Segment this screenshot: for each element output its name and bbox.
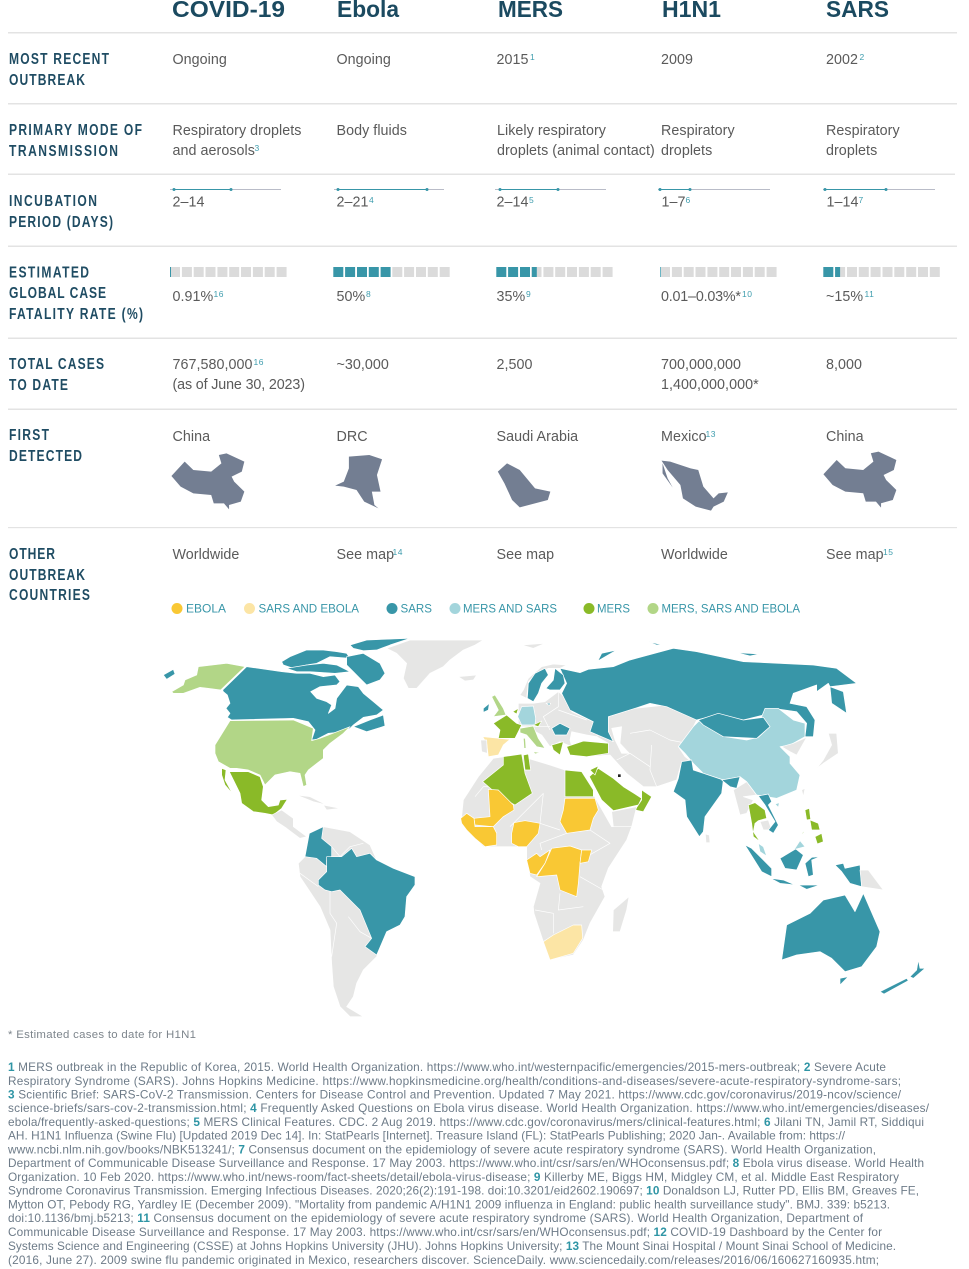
Madagascar <box>613 897 629 932</box>
row: first detected: DRC <box>336 429 368 445</box>
row: incubation period <box>9 188 935 230</box>
row: first detected: Mexico <box>661 429 707 445</box>
row: primary mode of transmission: Respiratory droplets <box>172 123 301 139</box>
Alaska <box>172 663 245 693</box>
references: Syndrome Coronavirus Transmission. Emerging Infectious Diseases. 2020;26(2):191-198. doi:10.3201/eid2602.190697; 10 Donaldson LJ, Rutter PD, Ellis BM, Greaves FE, <box>8 1184 919 1198</box>
column headings <box>172 0 889 22</box>
Southeast Asia grey <box>705 782 772 843</box>
row: primary mode of transmission: 3 <box>254 143 260 153</box>
row: incubation period: 5 <box>529 195 534 205</box>
references: doi:10.1136/bmj.b5213; 11 Consensus document on the epidemiology of severe acute respiratory syndrome (SARS). World Health Organization, Department of <box>8 1211 864 1225</box>
row: fatality rate: GLOBAL CASE <box>9 284 106 301</box>
row: most recent outbreak: 2 <box>860 52 865 62</box>
row: fatality rate: 0.91% <box>172 289 214 305</box>
row: primary mode of transmission: droplets (animal contact) <box>497 143 655 159</box>
row: primary mode of transmission: Respiratory <box>826 123 900 139</box>
Yemen <box>612 807 637 827</box>
row: total cases: TOTAL CASES <box>9 355 104 372</box>
row: incubation period: 7 <box>858 195 864 205</box>
row: other outbreak countries: OTHER <box>9 545 55 562</box>
row: most recent outbreak: Ongoing <box>336 52 391 68</box>
Egypt <box>565 770 593 797</box>
Ebola central Africa <box>527 798 598 897</box>
row: primary mode of transmission: and aerosols <box>172 143 255 159</box>
row: fatality rate: ~15% <box>826 289 863 305</box>
references: science-briefs/sars-cov-2-transmission.html; 4 Frequently Asked Questions on Ebola virus disease. World Health Organization. https://www.who.int/emergencies/diseases/ <box>8 1101 930 1115</box>
Nordic countries <box>527 668 565 705</box>
Papua New Guinea <box>860 870 883 890</box>
references: Respiratory Syndrome (SARS). Johns Hopkins Medicine. https://www.hopkinsmedicine.org/health/conditions-and-diseases/severe-acute-respiratory-syndrome-sars; <box>8 1074 901 1088</box>
row: most recent outbreak: 2009 <box>661 52 693 68</box>
row: incubation period: 1–7 <box>662 194 686 210</box>
Kuwait <box>618 774 621 777</box>
Malaysia <box>758 841 805 857</box>
Russia <box>560 642 857 742</box>
references: Communicable Disease Surveillance and Response. 17 May 2003. https://www.who.int/csr/sars/en/WHOconsensus.pdf; 12 COVID-19 Dashboard by the Center for <box>8 1225 882 1239</box>
references: Organization. 10 Feb 2020. https://www.who.int/news-room/fact-sheets/detail/ebola-virus-disease; 9 Killerby ME, Biggs HM, Midgley CM, et al. Middle East Respiratory <box>8 1170 899 1184</box>
South Africa <box>543 925 583 960</box>
row: fatality rate <box>9 263 940 322</box>
Vietnam <box>758 794 778 833</box>
row: first detected <box>9 426 896 511</box>
row: other outbreak countries: See map <box>826 547 884 563</box>
row: fatality rate: 8 <box>366 289 371 299</box>
map legend: MERS, SARS AND EBOLA <box>662 602 800 616</box>
row: most recent outbreak <box>9 50 865 88</box>
map legend: MERS AND SARS <box>463 602 557 616</box>
row: other outbreak countries: 14 <box>392 547 403 557</box>
Central America and Caribbean <box>272 795 340 838</box>
row: most recent outbreak: 2015 <box>496 52 529 68</box>
row: fatality rate: ESTIMATED <box>9 263 89 281</box>
row: incubation period: PERIOD (DAYS) <box>9 213 113 230</box>
row: incubation period: 2–21 <box>336 194 369 210</box>
icon: China silhouette <box>171 453 244 509</box>
Europe and central Asia grey <box>518 692 697 787</box>
Americas and western Europe <box>163 638 545 1017</box>
row: primary mode of transmission: droplets <box>661 143 712 159</box>
map legend: SARS <box>400 602 432 616</box>
references: 3 Scientific Brief: SARS-CoV-2 Transmission. Centers for Disease Control and Prevention. Updated 7 May 2021. https://www.cdc.gov/coronavirus/2019-ncov/science/ <box>8 1088 902 1102</box>
map legend: SARS AND EBOLA <box>258 602 359 616</box>
New Zealand <box>880 960 925 994</box>
references: AH. H1N1 Influenza (Swine Flu) [Updated 2019 Dec 14]. In: StatPearls [Internet]. Treasure Island (FL): StatPearls Publishing; 2020 Jan-. Available from: https:// <box>8 1128 846 1142</box>
row: total cases: ~30,000 <box>336 357 389 373</box>
row: fatality rate: 16 <box>214 289 224 299</box>
row: total cases: 16 <box>254 357 264 367</box>
row: fatality rate: 9 <box>526 289 531 299</box>
row: other outbreak countries <box>9 545 893 603</box>
icon: DRC silhouette <box>335 455 382 508</box>
Greenland and Iceland <box>387 640 545 688</box>
references: Systems Science and Engineering (CSSE) at Johns Hopkins University (JHU). Johns Hopkins University; 13 The Mount Sinai Hospital / Mount Sinai School of Medicine. <box>8 1239 896 1253</box>
row: incubation period: 2–14 <box>172 194 205 210</box>
row: first detected: 13 <box>706 429 716 439</box>
Mongolia <box>698 713 770 738</box>
row: incubation period: 4 <box>369 195 374 205</box>
references <box>7 1060 930 1267</box>
row: first detected: FIRST <box>9 426 49 443</box>
row: first detected: China <box>826 429 864 445</box>
row: fatality rate: 10 <box>742 289 752 299</box>
China <box>678 708 805 807</box>
row: total cases: 700,000,000 <box>661 357 741 373</box>
row: most recent outbreak: Ongoing <box>172 52 227 68</box>
Western Europe <box>481 695 522 757</box>
references: Mytton OT, Pebody RG, Yardley IE (December 2009). "Mortality from pandemic A/H1N1 2009 influenza in England: public health surveillance study". BMJ. 339: b5213. <box>8 1198 890 1212</box>
row: incubation period: 6 <box>686 195 691 205</box>
squares: COVID-19 <box>170 267 287 277</box>
Mexico <box>222 768 287 815</box>
Caspian Sea <box>612 727 629 753</box>
Thailand and Philippines <box>748 803 823 844</box>
row: total cases: (as of June 30, 2023) <box>172 377 305 393</box>
Algeria and Tunisia <box>483 754 532 805</box>
row: primary mode of transmission: PRIMARY MODE OF <box>9 121 142 138</box>
icon: China silhouette (SARS) <box>823 452 896 508</box>
squares: H1N1 <box>660 267 777 277</box>
row: most recent outbreak: MOST RECENT <box>9 50 109 67</box>
references: ebola/frequently-asked-questions; 5 MERS Clinical Features. CDC. 2 Aug 2019. https://www.cdc.gov/coronavirus/mers/clinical-features.html; 6 Jilani TN, Jamil RT, Siddiqui <box>8 1115 924 1129</box>
row: total cases: 2,500 <box>496 357 533 373</box>
Australia <box>782 893 880 972</box>
row: fatality rate: 11 <box>864 289 874 299</box>
South Asia <box>673 760 740 837</box>
row: first detected: DETECTED <box>9 447 82 464</box>
row: primary mode of transmission: TRANSMISSION <box>9 142 118 159</box>
row: other outbreak countries: See map <box>336 547 394 563</box>
squares: MERS <box>496 267 613 277</box>
Africa <box>462 755 632 960</box>
row: other outbreak countries: COUNTRIES <box>9 586 90 603</box>
row: total cases <box>9 355 862 393</box>
row: fatality rate: 35% <box>496 289 526 305</box>
Africa, Asia and Oceania <box>461 642 925 994</box>
squares: SARS <box>823 267 940 277</box>
icon: Saudi Arabia silhouette <box>498 463 550 507</box>
map legend: MERS <box>597 602 630 616</box>
United States <box>215 720 350 787</box>
row: other outbreak countries: 15 <box>883 547 893 557</box>
icon: Mexico silhouette <box>662 461 728 511</box>
row: incubation period: INCUBATION <box>9 192 97 209</box>
Ebola west Africa <box>461 789 540 847</box>
references: (2016, June 27). 2009 swine flu pandemic originated in Mexico, researchers discover. ScienceDaily. www.sciencedaily.com/releases/2016/06/160627160935.htm; <box>8 1253 879 1267</box>
row: most recent outbreak: 2002 <box>826 52 858 68</box>
row: fatality rate: 0.01–0.03%* <box>661 289 741 305</box>
estimated cases note: * Estimated cases to date for H1N1 <box>8 1029 196 1041</box>
South America <box>298 827 393 1017</box>
row: other outbreak countries: Worldwide <box>172 547 239 563</box>
row: first detected: China <box>172 429 210 445</box>
row: total cases: TO DATE <box>9 376 68 393</box>
row: total cases: 767,580,000 <box>172 357 253 373</box>
row: primary mode of transmission: Likely respiratory <box>497 123 607 139</box>
squares: Ebola <box>333 267 450 277</box>
row: fatality rate: 50% <box>336 289 366 305</box>
Canada <box>163 638 410 740</box>
Indonesia <box>745 845 862 889</box>
row: first detected: Saudi Arabia <box>496 429 578 445</box>
row: other outbreak countries: Worldwide <box>661 547 728 563</box>
Korea and Japan <box>782 733 838 797</box>
row: most recent outbreak: 1 <box>530 52 535 62</box>
row: primary mode of transmission <box>9 121 900 159</box>
map legend: EBOLA <box>186 602 226 616</box>
map legend <box>172 602 800 616</box>
row: primary mode of transmission: Respiratory <box>661 123 735 139</box>
references: www.ncbi.nlm.nih.gov/books/NBK513241/; 7 Consensus document on the epidemiology of severe acute respiratory syndrome (SARS). World Health Organization, <box>7 1142 876 1156</box>
row: primary mode of transmission: droplets <box>826 143 877 159</box>
references: Department of Communicable Disease Surveillance and Response. 17 May 2003. https://www.who.int/csr/sars/en/WHOconsensus.pdf; 8 Ebola virus disease. World Health <box>8 1156 924 1170</box>
row: most recent outbreak: OUTBREAK <box>9 71 85 88</box>
Middle East MERS group <box>552 741 652 812</box>
row: other outbreak countries: See map <box>496 547 554 563</box>
Norway <box>520 664 567 698</box>
row: total cases: 1,400,000,000* <box>661 377 759 393</box>
row: primary mode of transmission: Body fluids <box>336 123 407 139</box>
Colombia and Brazil <box>305 827 415 955</box>
Tasmania <box>840 977 848 985</box>
row: incubation period: 1–14 <box>826 194 859 210</box>
row: other outbreak countries: OUTBREAK <box>9 566 85 583</box>
world map <box>163 638 925 1017</box>
row: fatality rate: FATALITY RATE (%) <box>9 305 143 322</box>
row: incubation period: 2–14 <box>496 194 529 210</box>
Germany and central Europe <box>518 706 570 754</box>
row: total cases: 8,000 <box>826 357 862 373</box>
references: 1 MERS outbreak in the Republic of Korea, 2015. World Health Organization. https://www.who.int/westernpacific/emergencies/2015-mers-outbreak; 2 Severe Acute <box>8 1060 886 1074</box>
